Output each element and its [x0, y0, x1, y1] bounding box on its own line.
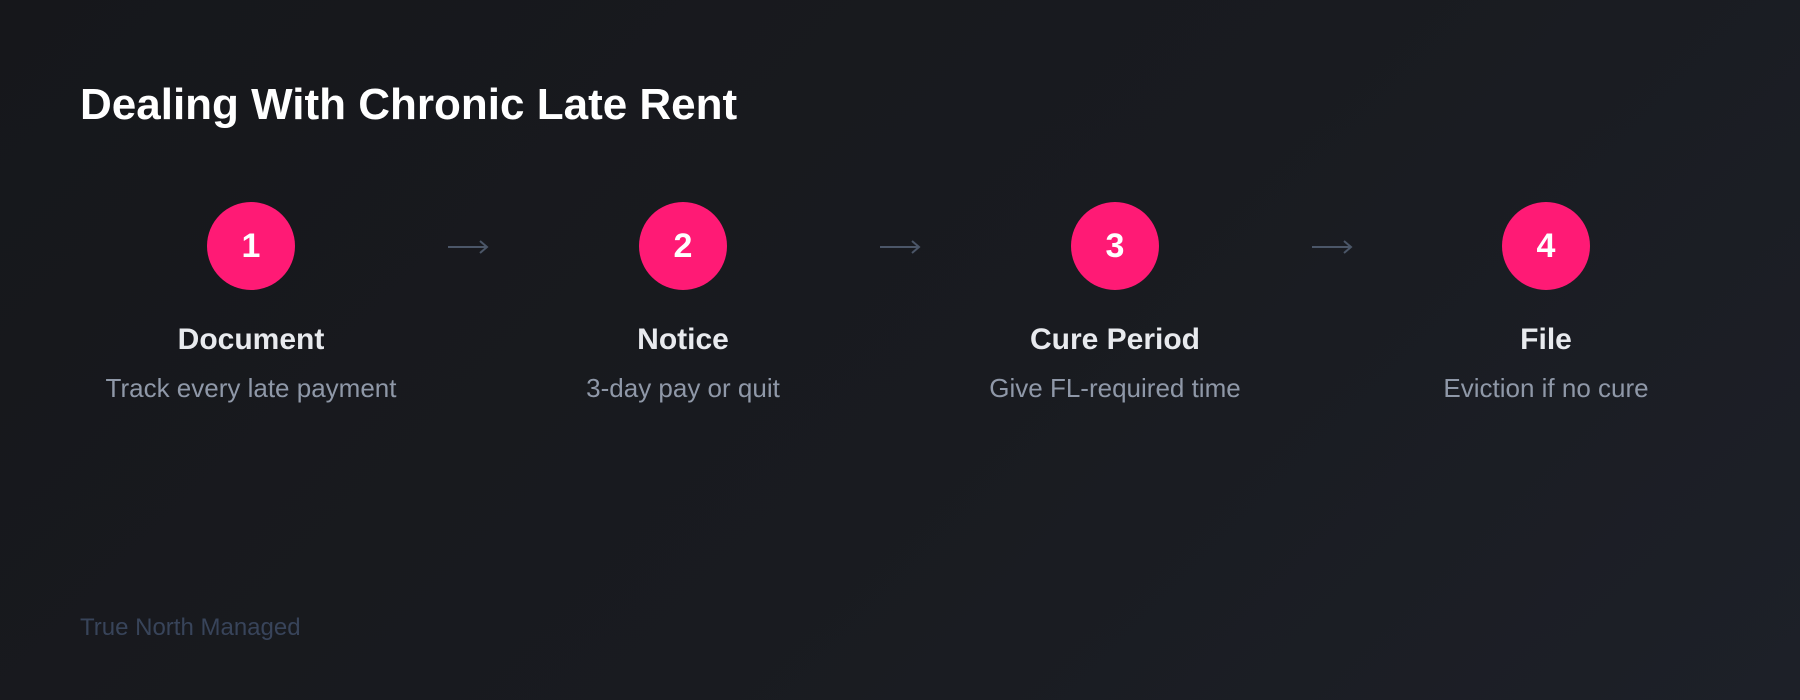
icon: number 4 circle: 4	[1537, 227, 1555, 265]
step 4: File	[1443, 202, 1649, 403]
step 1: Document	[106, 202, 396, 403]
step description: Track every late payment	[106, 373, 396, 403]
arrow 3	[1312, 240, 1352, 254]
icon: number 1 circle	[207, 202, 295, 290]
icon: number 1 circle: 1	[242, 227, 260, 265]
icon: number 3 circle: 3	[1106, 227, 1124, 265]
arrow 1	[448, 240, 488, 254]
step description: Eviction if no cure	[1443, 373, 1649, 403]
step 3: Cure Period	[989, 202, 1241, 403]
step description: Give FL-required time	[989, 373, 1241, 403]
step 2: Notice	[586, 202, 780, 403]
icon: number 4 circle	[1502, 202, 1590, 290]
step description: 3-day pay or quit	[586, 373, 780, 403]
step title: File	[1520, 323, 1572, 356]
title: Dealing With Chronic Late Rent	[80, 80, 737, 129]
step title: Cure Period	[1030, 323, 1200, 356]
icon: number 2 circle: 2	[674, 227, 692, 265]
icon: number 3 circle	[1071, 202, 1159, 290]
icon: number 2 circle	[639, 202, 727, 290]
footer brand: True North Managed	[80, 614, 301, 641]
step title: Notice	[637, 323, 729, 356]
arrow 2	[880, 240, 920, 254]
step title: Document	[178, 323, 324, 356]
